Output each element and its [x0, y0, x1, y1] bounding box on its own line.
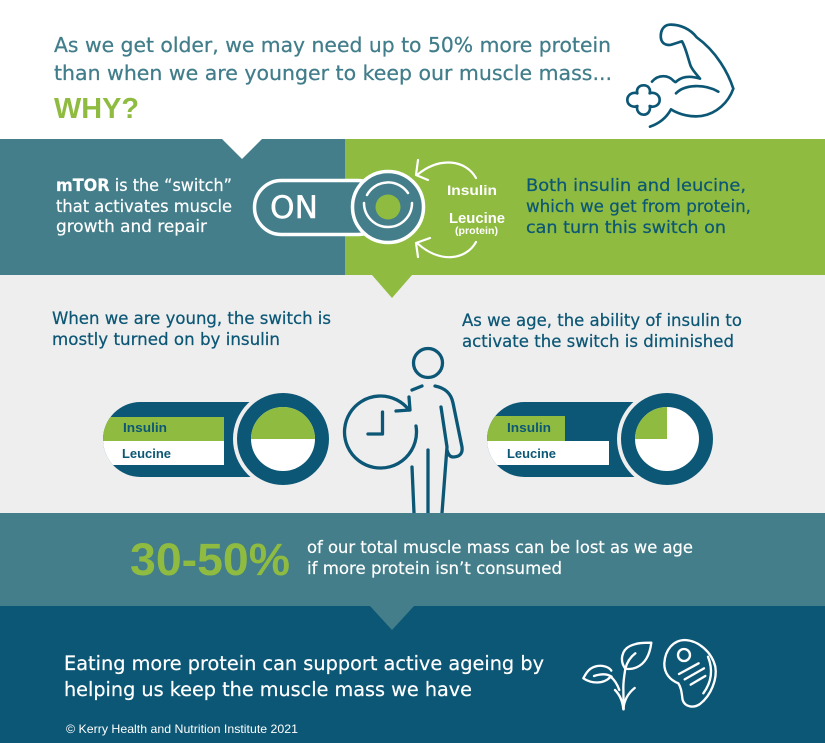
text: mTOR definition: mTOR is the “switch”	[56, 176, 232, 196]
text: aged: As we age, the ability of insulin to	[462, 311, 742, 331]
stat: 30-50%: 30-50%	[130, 534, 290, 585]
notch: green pointer	[372, 275, 412, 298]
panel: conclusion	[0, 606, 825, 743]
text: stat description	[307, 538, 693, 579]
label: insulin with arrow	[416, 160, 497, 198]
panel: insulin and leucine	[345, 139, 825, 275]
text: mTOR definition	[56, 176, 232, 237]
label: insulin with arrow: Insulin	[447, 182, 497, 198]
text: conclusion: Eating more protein can support active ageing by	[64, 652, 544, 675]
text: conclusion: helping us keep the muscle mass we have	[64, 678, 472, 701]
text: young	[52, 309, 331, 350]
text: stat description: if more protein isn’t consumed	[307, 559, 562, 579]
heading: intro statement	[54, 33, 612, 85]
chart: young switch: Leucine	[122, 446, 171, 461]
text: conclusion	[64, 652, 544, 701]
text: mTOR definition: that activates muscle	[56, 197, 232, 217]
text: aged	[462, 311, 742, 352]
text: young: mostly turned on by insulin	[52, 330, 280, 350]
icon: mTOR on switch: ON	[270, 190, 318, 226]
text: switch activators: can turn this switch on	[526, 218, 726, 238]
notch: teal pointer	[370, 606, 414, 630]
chart: aged switch: Leucine	[507, 446, 556, 461]
text: mTOR definition: growth and repair	[56, 217, 207, 237]
heading: why: WHY?	[54, 93, 139, 125]
chart: aged switch	[487, 389, 717, 489]
text: stat description: of our total muscle mass can be lost as we age	[307, 538, 693, 558]
chart: young switch: Insulin	[123, 420, 167, 435]
notch: white pointer	[222, 139, 262, 159]
text: switch activators: Both insulin and leucine,	[526, 176, 746, 196]
panel: muscle loss statistic	[0, 513, 825, 606]
icon: clock and person	[345, 348, 462, 513]
label: leucine with arrow: Leucine	[449, 210, 505, 227]
icon: mTOR on switch	[254, 172, 424, 242]
chart: aged switch: Insulin	[507, 420, 551, 435]
icon: plant	[583, 643, 651, 709]
panel: top intro	[0, 0, 825, 139]
text: switch activators	[526, 176, 751, 238]
icon: flexed muscle with cross	[627, 25, 733, 127]
panel: mTOR definition	[0, 139, 345, 275]
text: copyright: © Kerry Health and Nutrition Institute 2021	[66, 722, 298, 736]
chart: young switch	[103, 389, 333, 489]
panel: young versus aged comparison	[0, 275, 825, 513]
text: aged: activate the switch is diminished	[462, 332, 734, 352]
label: leucine with arrow: (protein)	[455, 226, 498, 237]
heading: intro statement: As we get older, we may need up to 50% more protein	[54, 33, 611, 57]
label: leucine with arrow	[416, 210, 505, 257]
text: switch activators: which we get from protein,	[526, 197, 751, 217]
icon: meat	[664, 640, 716, 707]
text: young: When we are young, the switch is	[52, 309, 331, 329]
heading: intro statement: than when we are younger to keep our muscle mass...	[54, 61, 612, 85]
